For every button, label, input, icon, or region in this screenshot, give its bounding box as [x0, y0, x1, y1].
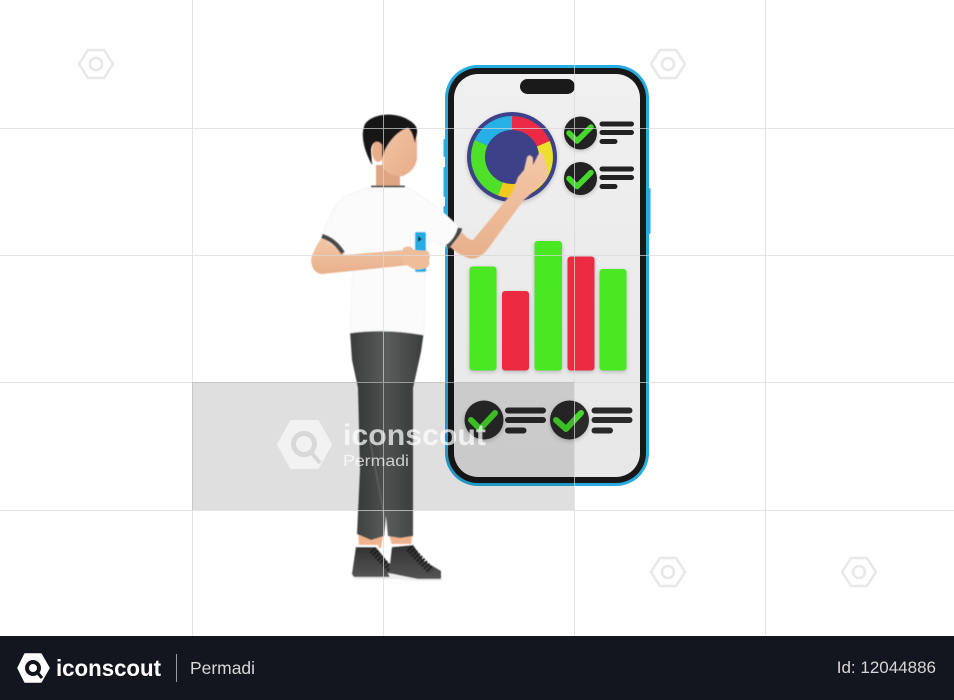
footer asset id: Id: 12044886 [837, 658, 936, 677]
left hand [402, 246, 430, 270]
left shoe [352, 547, 394, 579]
hair [363, 115, 417, 165]
white socks [357, 544, 412, 549]
right arm pointing at chart [450, 153, 548, 259]
person [311, 115, 460, 581]
neck [376, 165, 400, 188]
footer brand name: iconscout [56, 655, 161, 681]
right shoe [388, 545, 442, 581]
bar chart [470, 241, 626, 370]
large watermark [192, 382, 574, 510]
right leg ankle [388, 530, 413, 546]
check item 2 [564, 162, 634, 195]
head [380, 126, 417, 176]
left arm [311, 237, 410, 274]
footer divider [176, 654, 177, 682]
left leg ankle [358, 530, 384, 548]
trousers [350, 331, 424, 540]
check item 4 [550, 400, 632, 440]
right sleeve cuff [447, 228, 460, 247]
phone notch [520, 79, 575, 94]
check item 3 [464, 400, 546, 440]
footer bar [0, 636, 954, 700]
small watermark icons [79, 50, 876, 586]
phone [444, 65, 650, 486]
left sleeve cuff [322, 236, 343, 253]
donut chart [467, 112, 557, 202]
watermark author: Permadi [343, 453, 409, 470]
footer logo [18, 654, 49, 682]
collar [371, 186, 405, 188]
footer author: Permadi [190, 658, 255, 678]
hand-held phone [415, 232, 426, 272]
phone side buttons [444, 139, 650, 236]
watermark brand name: iconscout [343, 419, 486, 452]
check item 1 [564, 116, 634, 150]
watermark logo [278, 421, 331, 468]
phone screen [454, 74, 640, 477]
t-shirt [322, 186, 460, 335]
watermark panel [192, 382, 574, 510]
ear [372, 140, 384, 162]
phone frame [445, 65, 649, 486]
